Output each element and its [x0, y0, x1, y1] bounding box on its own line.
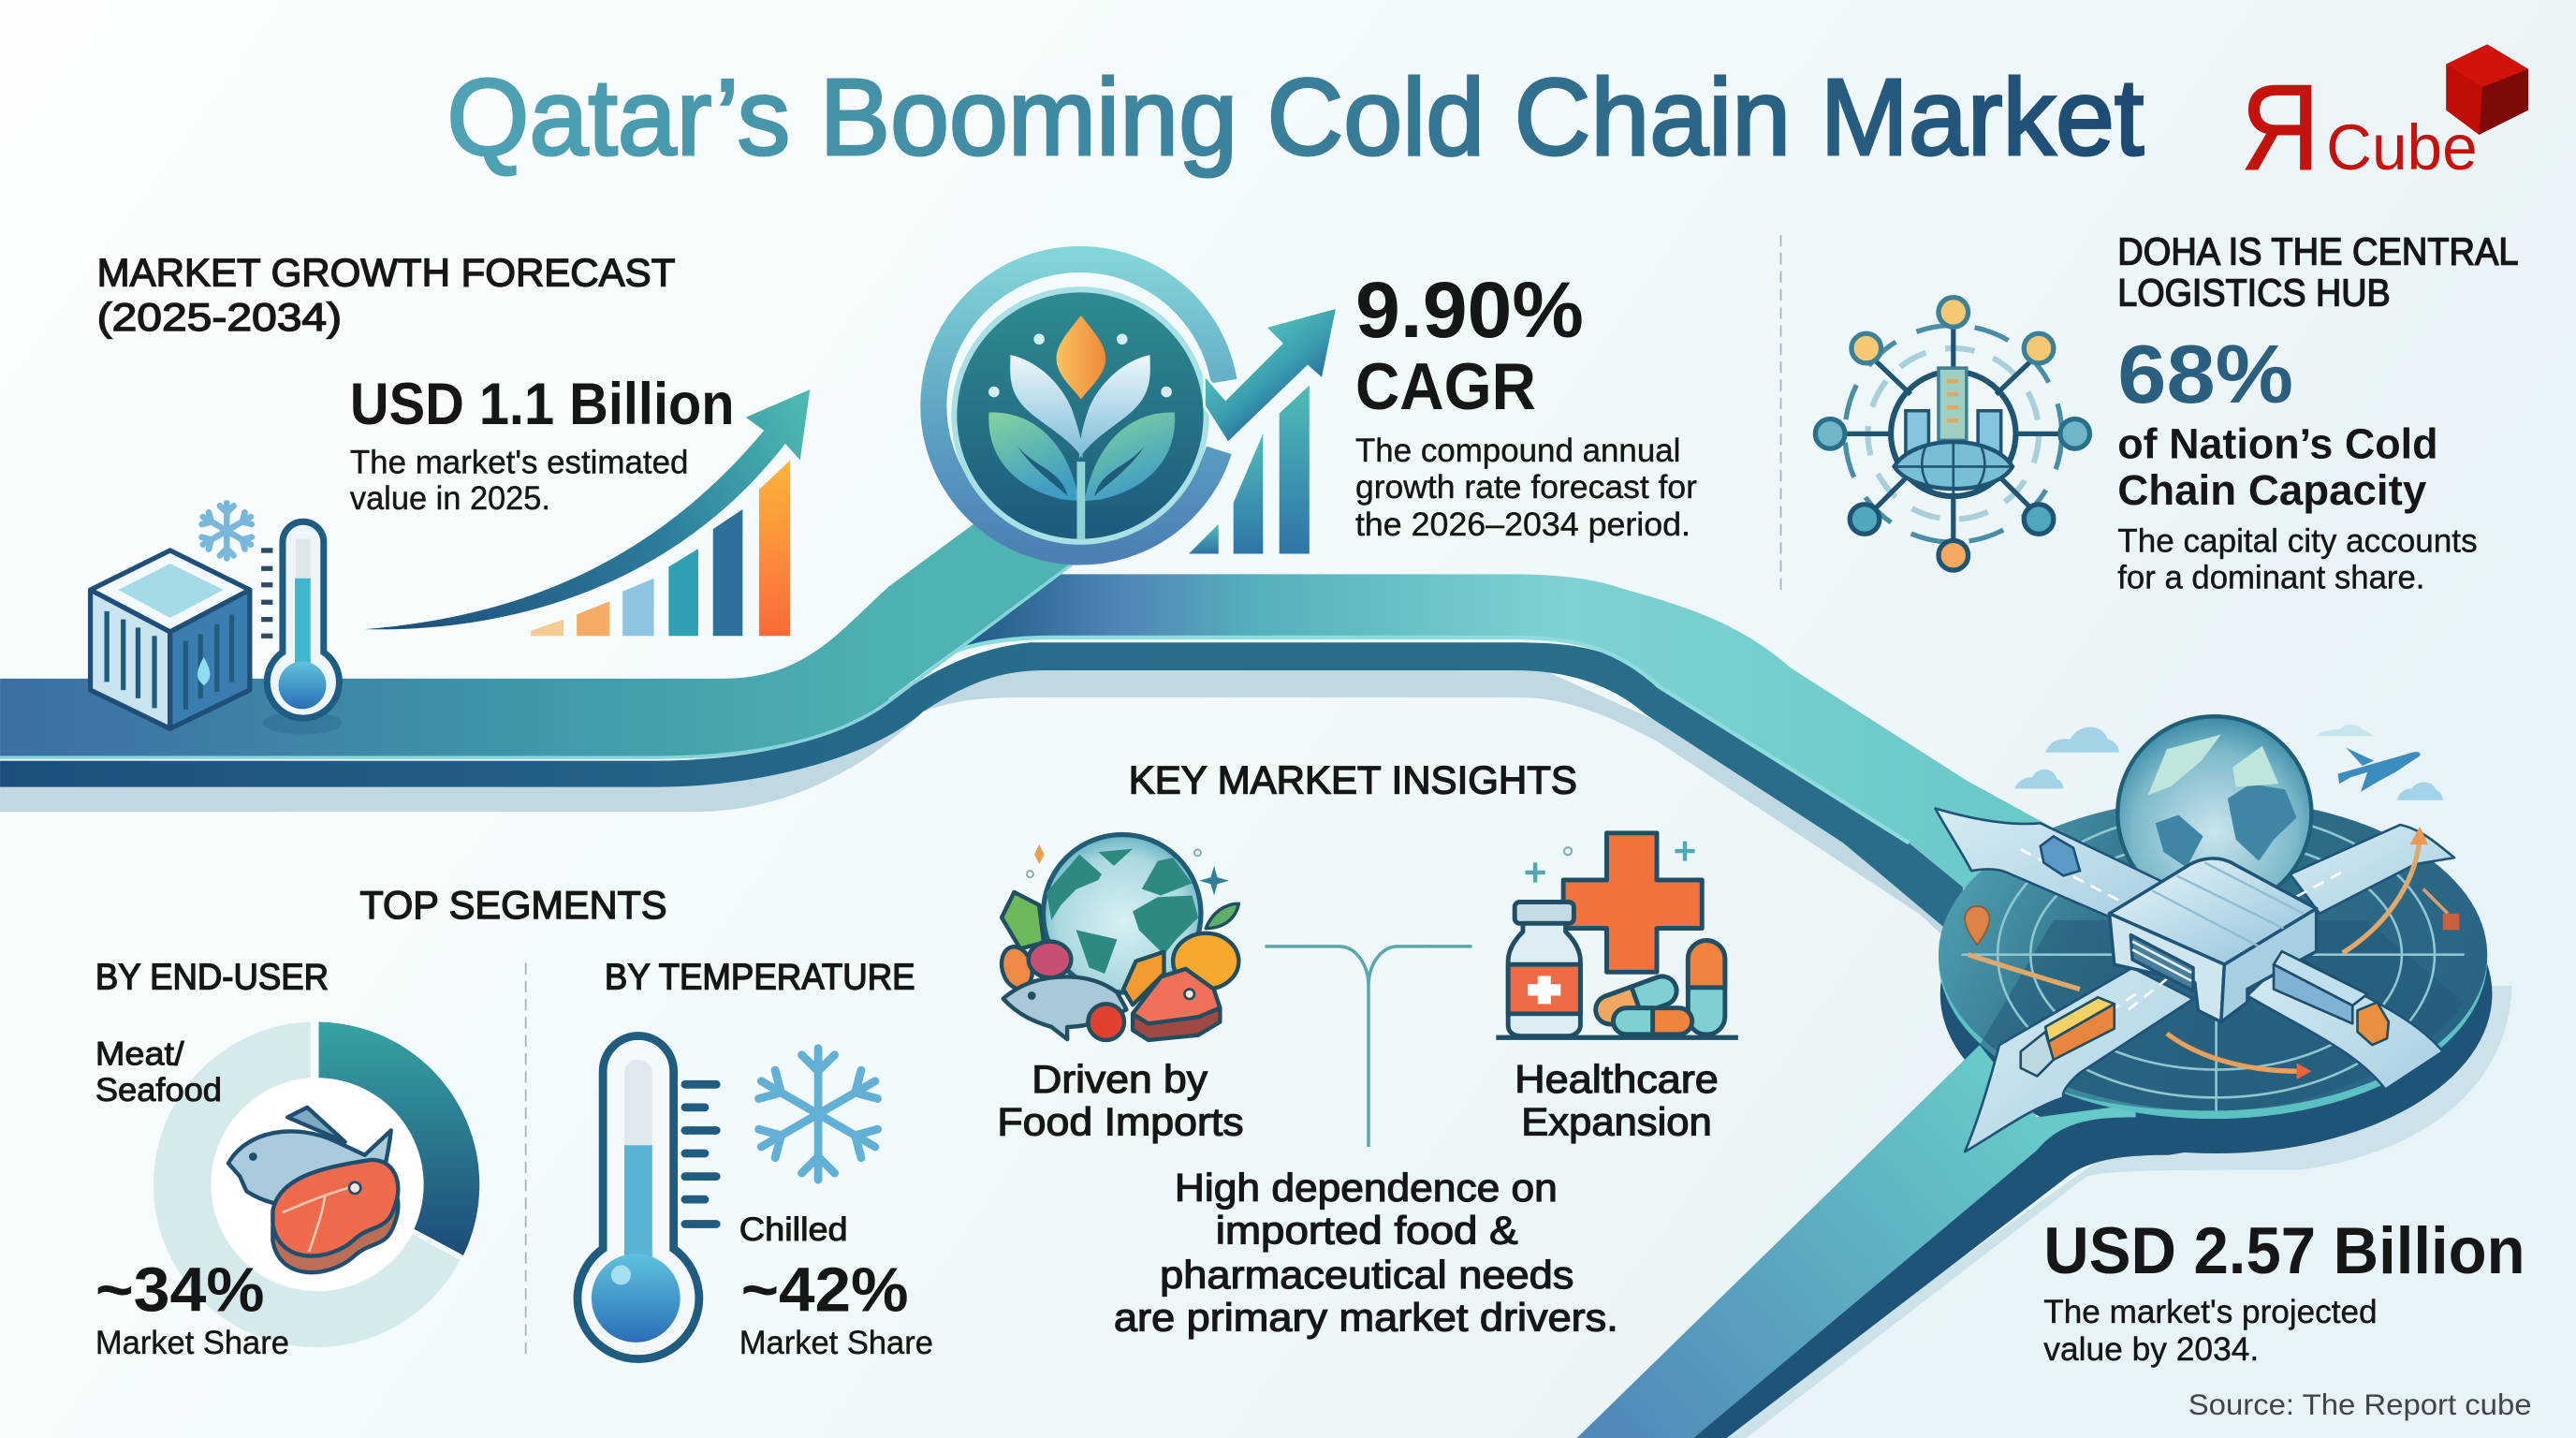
arrow: growth swoosh: [365, 389, 810, 629]
icon: clouds: [2014, 725, 2443, 800]
text: market drivers: are primary market drivers.: [1114, 1296, 1618, 1340]
text: projected value: [2043, 1294, 2378, 1368]
text: projected value: The market's projected: [2043, 1294, 2378, 1330]
text: estimated value: [350, 444, 688, 517]
icon: orange truck: [2021, 997, 2115, 1077]
icon: globe: [2117, 716, 2311, 910]
icon: fish and steak: [228, 1108, 398, 1272]
text: market drivers: High dependence on: [1175, 1166, 1558, 1210]
divider: [1780, 235, 1782, 594]
heading: Doha hub: [2117, 230, 2519, 314]
value: 9.90% CAGR: CAGR: [1355, 349, 1536, 423]
text: capital share: [2117, 523, 2478, 595]
icon: large thermometer: [578, 1036, 716, 1359]
heading: Doha hub: DOHA IS THE CENTRAL: [2117, 230, 2519, 273]
panel: logistics hub destination: [1575, 716, 2525, 1438]
subheading: by temperature: BY TEMPERATURE: [605, 958, 915, 998]
icon: large snowflake: [753, 1049, 884, 1180]
text: capital share: The capital city accounts: [2117, 523, 2478, 560]
icon: healthcare cross and medicine: [1496, 833, 1738, 1037]
icon: crossing roads: [1935, 808, 2454, 1152]
logo: RCube: [2241, 44, 2528, 196]
source note: Source: The Report cube: [2188, 1387, 2532, 1421]
road: lower ribbon: [1575, 835, 2511, 1438]
value: 9.90% CAGR: 9.90%: [1355, 266, 1584, 354]
text: estimated value: The market's estimated: [350, 444, 688, 480]
value: 34 percent: Market Share: [95, 1325, 289, 1361]
text: CAGR description: the 2026–2034 period.: [1355, 506, 1690, 543]
divider: [525, 962, 527, 1354]
subheading: by end-user: BY END-USER: [95, 958, 329, 998]
icon: hub disc: [1939, 799, 2487, 1119]
title: Qatar’s Booming Cold Chain Market: [446, 56, 2144, 178]
value: USD 2.57 Billion: USD 2.57 Billion: [2043, 1213, 2525, 1287]
panel: key market insights: [997, 758, 1738, 1340]
arrow: CAGR upward: [1204, 307, 1338, 443]
icon: blue truck: [2274, 951, 2389, 1045]
value: 34 percent: [95, 1256, 289, 1361]
connector: T-shaped link: [1265, 946, 1472, 1147]
label: meat/seafood: Meat/: [95, 1035, 184, 1072]
text: CAGR description: [1355, 433, 1697, 543]
icon: globe with food: [997, 835, 1238, 1040]
text: CAGR description: growth rate forecast for: [1355, 469, 1697, 506]
label: healthcare expansion: Healthcare: [1515, 1057, 1719, 1101]
text: market drivers: pharmaceutical needs: [1160, 1253, 1573, 1297]
value: 42 percent: [739, 1256, 933, 1361]
icon: location pin: [1965, 906, 1989, 945]
value: USD 1.1 Billion: USD 1.1 Billion: [350, 372, 735, 437]
value: 34 percent: ~34%: [95, 1256, 265, 1326]
value: 9.90% CAGR: [1355, 266, 1584, 423]
label: driven by food imports: [997, 1057, 1244, 1144]
icon: cold container: [91, 550, 250, 728]
logo: RCube: Я: [2241, 59, 2320, 196]
text: CAGR description: The compound annual: [1355, 433, 1680, 469]
icon: logistics network: [1815, 298, 2089, 570]
value: 68%: 68%: [2117, 329, 2293, 420]
icon: van: [2041, 836, 2080, 875]
heading: market growth forecast: [97, 250, 675, 339]
text: estimated value: value in 2025.: [350, 480, 550, 517]
chart: rising bars: [531, 460, 790, 636]
arrows: routes on hub: [1969, 827, 2459, 1079]
label: healthcare expansion: Expansion: [1521, 1100, 1712, 1144]
heading: market growth forecast: MARKET GROWTH FORECAST: [97, 250, 675, 294]
icon: growth emblem: [933, 259, 1224, 551]
heading: Doha hub: LOGISTICS HUB: [2117, 271, 2391, 314]
text: market drivers: [1114, 1166, 1618, 1340]
chart: end-user donut: [154, 1022, 479, 1347]
icon: small thermometer: [261, 521, 342, 734]
icon: airplane: [2337, 748, 2420, 792]
chart: bars behind emblem: [1189, 386, 1310, 553]
heading: market growth forecast: (2025-2034): [97, 295, 342, 339]
label: meat/seafood: Seafood: [95, 1072, 222, 1108]
heading: key market insights: KEY MARKET INSIGHTS: [1129, 758, 1577, 802]
label: meat/seafood: [95, 1035, 222, 1108]
text: capital share: for a dominant share.: [2117, 559, 2424, 595]
panel: Doha logistics hub: [1815, 230, 2519, 595]
panel: top segments: [95, 883, 933, 1361]
text: market drivers: imported food &: [1216, 1209, 1518, 1253]
icon: warehouse: [2110, 858, 2317, 1022]
icon: small snowflake: [199, 503, 254, 558]
flowing road ribbon: [0, 513, 2086, 945]
panel: market growth forecast: [91, 250, 810, 734]
label: driven by food imports: Food Imports: [997, 1100, 1244, 1144]
logo: RCube: Cube: [2326, 111, 2478, 183]
label: nation's capacity: [2117, 420, 2438, 514]
panel: CAGR: [933, 259, 1697, 553]
label: chilled: Chilled: [739, 1211, 848, 1248]
value: 42 percent: Market Share: [739, 1325, 933, 1361]
value: 42 percent: ~42%: [741, 1256, 909, 1326]
label: healthcare expansion: [1515, 1057, 1719, 1144]
label: driven by food imports: Driven by: [1032, 1057, 1208, 1101]
heading: top segments: TOP SEGMENTS: [359, 883, 667, 927]
label: nation's capacity: of Nation’s Cold: [2117, 420, 2438, 468]
text: projected value: value by 2034.: [2043, 1331, 2259, 1368]
label: nation's capacity: Chain Capacity: [2117, 466, 2427, 514]
